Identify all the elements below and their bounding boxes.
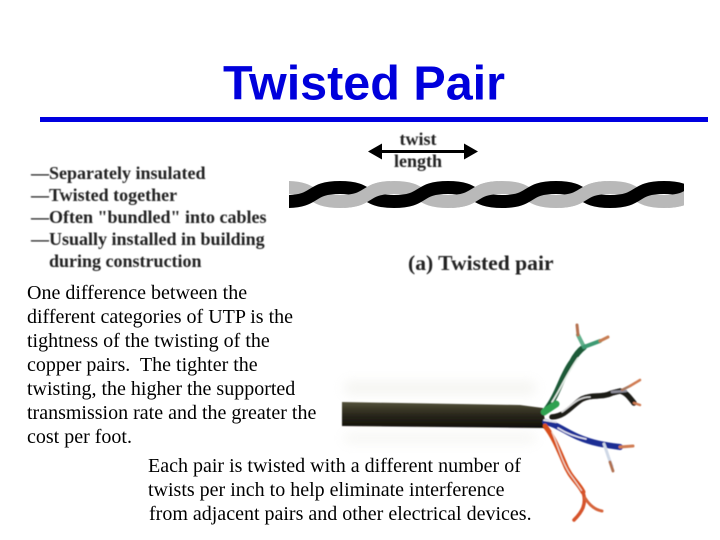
orange pair (545, 426, 583, 492)
cable shadow (345, 382, 535, 442)
second explanatory paragraph: twists per inch to help eliminate interference (148, 479, 505, 501)
explanatory paragraph: transmission rate and the greater the (27, 402, 316, 424)
twist length label and arrow (368, 129, 478, 171)
twisted pair diagram (232, 188, 718, 202)
twist length label and arrow: twist (400, 129, 436, 149)
explanatory paragraph: One difference between the (27, 282, 247, 304)
cable jacket (342, 402, 546, 428)
second explanatory paragraph: Each pair is twisted with a different number of (148, 455, 521, 477)
cable photo (342, 325, 640, 520)
explanatory paragraph: different categories of UTP is the (27, 306, 293, 328)
feature list: —Usually installed in building (30, 229, 265, 249)
title: Twisted Pair (223, 56, 505, 110)
explanatory paragraph: tightness of the twisting of the (27, 330, 270, 352)
wires (544, 325, 640, 520)
twist length label and arrow: length (394, 151, 442, 171)
feature list (30, 163, 267, 271)
second explanatory paragraph: from adjacent pairs and other electrical devices. (149, 503, 532, 525)
feature list: —Separately insulated (30, 163, 206, 183)
figure caption: (a) Twisted pair (408, 251, 554, 275)
green pair (546, 347, 584, 410)
feature list: during construction (49, 251, 202, 271)
explanatory paragraph: copper pairs. The tighter the (27, 354, 258, 376)
blue pair (545, 422, 620, 447)
second explanatory paragraph (148, 455, 532, 525)
explanatory paragraph (27, 282, 316, 448)
title rule (40, 117, 708, 122)
feature list: —Often "bundled" into cables (30, 207, 267, 227)
black pair (552, 391, 634, 417)
feature list: —Twisted together (30, 185, 177, 205)
explanatory paragraph: twisting, the higher the supported (27, 378, 295, 400)
explanatory paragraph: cost per foot. (27, 426, 132, 448)
